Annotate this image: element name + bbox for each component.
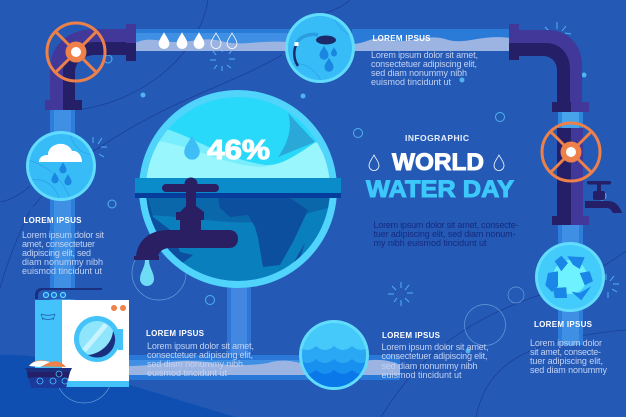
pipe: globe stem water	[227, 285, 251, 357]
text: rain: diam nonummy nibh	[22, 257, 103, 267]
text: waves: euismod tincidunt ut	[382, 370, 462, 380]
icon: title drop left	[369, 155, 379, 170]
icon: shower circle	[285, 13, 355, 83]
pipe: right elbow	[509, 24, 589, 112]
text: shower	[371, 34, 478, 87]
text: laundry: Lorem ipsum dolor sit amet,	[147, 341, 254, 351]
bottom wave	[0, 355, 235, 417]
percentage drop	[184, 136, 200, 160]
pipe: top right water	[352, 29, 510, 51]
text: waves	[382, 331, 488, 380]
text: shower: euismod tincidunt ut	[371, 77, 451, 87]
icon: waves circle	[299, 320, 370, 392]
washing machine	[35, 288, 129, 387]
icon: recycle circle	[535, 242, 605, 312]
text: recycle: LOREM IPSUS	[534, 320, 593, 329]
title: WORLD	[392, 149, 484, 176]
icon: left valve	[47, 23, 105, 81]
percentage: 46%	[207, 134, 270, 165]
text: waves: LOREM IPSUS	[382, 331, 441, 340]
text: shower: sed diam nonummy nibh	[371, 68, 467, 78]
pipe: left elbow	[45, 24, 136, 110]
text: shower: LOREM IPSUS	[372, 34, 431, 43]
laundry basket	[25, 360, 72, 388]
text: laundry: euismod tincidunt ut	[147, 368, 227, 378]
pipe: right lower section	[552, 128, 589, 225]
globe band	[135, 178, 341, 198]
icon: right valve	[542, 123, 600, 181]
text: rain: LOREM IPSUS	[24, 216, 82, 225]
pipe: top left water	[135, 29, 290, 51]
title: INFOGRAPHIC	[405, 133, 469, 143]
icon: rain circle	[26, 131, 96, 201]
pipe: right vertical water	[558, 112, 583, 345]
title: WATER DAY	[366, 176, 514, 203]
text: laundry	[146, 329, 254, 378]
text: description	[374, 220, 518, 248]
text: waves: consectetuer adipiscing elit,	[382, 351, 488, 361]
text: waves: sed diam nonummy nibh	[382, 361, 478, 371]
text: recycle: sit amet, consecte-	[530, 347, 601, 357]
sparkles	[93, 22, 619, 306]
text: shower: Lorem ipsum dolor sit amet,	[371, 50, 478, 60]
text: waves: Lorem ipsum dolor sit amet,	[382, 342, 488, 352]
text: laundry: consectetuer adipiscing elit,	[147, 350, 253, 360]
text: recycle	[530, 320, 608, 375]
progress drops	[159, 33, 237, 48]
pipe: left vertical water	[50, 110, 75, 300]
icon: title drop right	[494, 155, 504, 170]
faucet	[134, 178, 238, 260]
text: recycle: tuer adipiscing elit,	[530, 356, 603, 366]
globe: upper water	[146, 97, 330, 178]
text: rain: Lorem ipsum dolor sit	[22, 230, 104, 240]
globe	[139, 90, 340, 295]
text: rain: euismod tincidunt ut	[22, 266, 102, 276]
text: shower: consectetuer adipiscing elit,	[371, 59, 477, 69]
water drop	[140, 260, 154, 286]
text: rain: amet, consectetuer	[22, 239, 95, 249]
text: recycle: sed diam nonummy	[530, 365, 608, 375]
text: description: Lorem ipsum dolor sit amet, consecte-	[374, 220, 518, 230]
dots	[140, 72, 586, 354]
text: description: tuer adipiscing elit, sed diam nonum-	[374, 229, 516, 239]
pipe: bottom water	[129, 355, 400, 380]
text: rain: adipiscing elit, sed	[22, 248, 91, 258]
title	[366, 133, 514, 203]
globe: lower water and land	[146, 198, 330, 281]
text: rain	[22, 216, 104, 276]
text: description: my nibh euismod tincidunt ut	[374, 238, 487, 248]
text: laundry: LOREM IPSUS	[146, 329, 205, 338]
icon: small faucet	[585, 181, 622, 213]
text: laundry: sed diam nonummy nibh	[147, 359, 243, 369]
text: recycle: Lorem ipsum dolor	[530, 338, 602, 348]
